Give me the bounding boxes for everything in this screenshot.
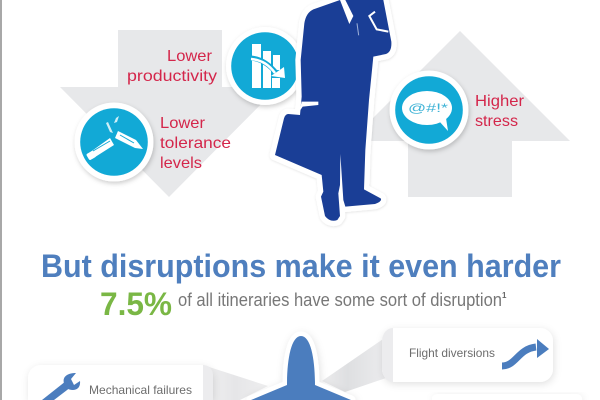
airplane xyxy=(251,336,351,400)
down arrow xyxy=(60,30,278,197)
label: lower tolerance levels xyxy=(160,115,231,172)
callout connector: right xyxy=(322,337,386,392)
label: lower tolerance levels: tolerance xyxy=(160,135,231,152)
callout connector: left xyxy=(203,365,268,400)
icon: broken pencil xyxy=(74,102,154,182)
icon: swearing speech bubble xyxy=(390,70,468,150)
label: lower tolerance levels: levels xyxy=(160,155,202,172)
phone hand outline xyxy=(369,12,388,32)
callout: mechanical failures xyxy=(28,365,213,400)
heading: But disruptions make it even harder xyxy=(41,248,561,284)
callout: mechanical failures: Mechanical failures xyxy=(89,383,192,397)
label: higher stress: Higher xyxy=(475,93,525,110)
icon: falling bar chart xyxy=(226,27,304,105)
icon: swearing speech bubble: @#!* xyxy=(408,101,448,115)
callout: partial third box xyxy=(432,394,582,400)
statistic: 7.5%: 7.5% xyxy=(100,286,172,322)
label: lower tolerance levels: Lower xyxy=(160,115,206,132)
icon: curved arrow xyxy=(502,339,549,366)
collar xyxy=(340,0,353,24)
tie highlight xyxy=(357,23,359,35)
cuff highlight xyxy=(299,102,318,112)
businessman silhouette xyxy=(275,0,391,221)
up arrow xyxy=(350,31,570,197)
icon: wrench xyxy=(42,373,80,400)
label: higher stress xyxy=(475,93,525,130)
label: lower productivity: productivity xyxy=(127,68,217,85)
callout: flight diversions: Flight diversions xyxy=(409,346,495,360)
label: lower productivity xyxy=(127,48,217,85)
statistic description: of all itineraries have some sort of disruption xyxy=(178,290,502,310)
callout: flight diversions xyxy=(382,328,553,382)
label: lower productivity: Lower xyxy=(167,48,213,65)
footnote marker: 1 xyxy=(502,291,507,300)
label: higher stress: stress xyxy=(475,113,518,130)
